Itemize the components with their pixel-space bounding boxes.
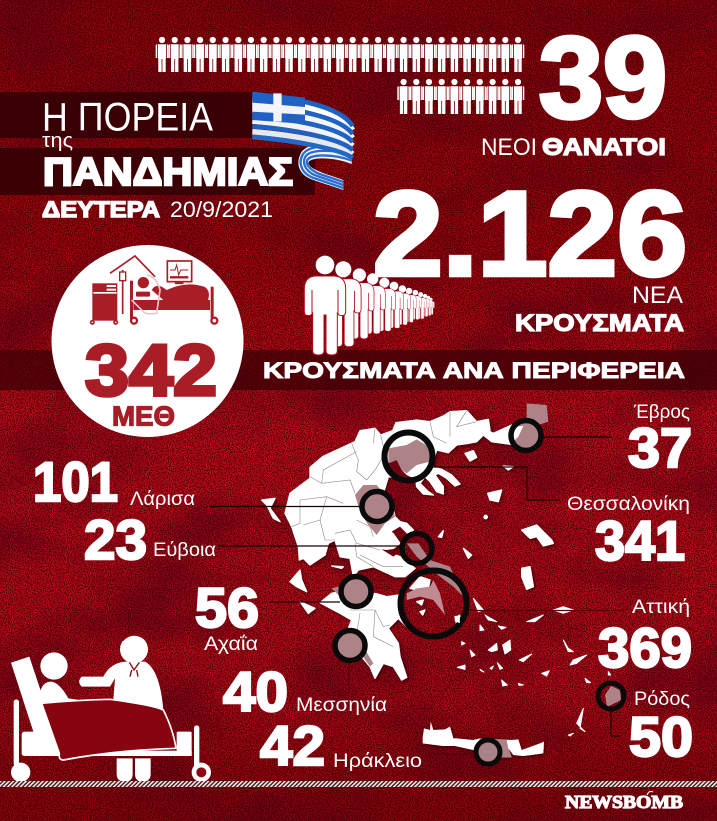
- icon: nurse and patient in bed: [11, 635, 209, 782]
- title panel: ΠΑΝΔΗΜΙΑΣ: [43, 151, 293, 194]
- label: Messinia 40: [223, 660, 387, 723]
- stat: 2.126 new cases: ΚΡΟΥΣΜΑΤΑ: [515, 310, 684, 337]
- map of Greece: [210, 403, 625, 764]
- label: Rhodes 50: 50: [629, 705, 693, 768]
- title panel: Η ΠΟΡΕΙΑ: [42, 96, 213, 140]
- label: Larissa 101: [33, 450, 195, 513]
- islands of the Aegean: [455, 598, 611, 736]
- Rhodes: [605, 686, 621, 707]
- panel: ICU patients circle: ΜΕΘ: [112, 400, 175, 432]
- label: Heraklion 42: Ηράκλειο: [333, 751, 422, 772]
- label: Evia 23: 23: [84, 508, 147, 571]
- label: Heraklion 42: 42: [260, 714, 325, 777]
- heading: cases by region: ΚΡΟΥΣΜΑΤΑ ΑΝΑ ΠΕΡΙΦΕΡΕΙΑ: [263, 358, 685, 383]
- label: Achaia 56: 56: [195, 576, 259, 639]
- stat: 2.126 new cases: 2.126: [373, 167, 687, 301]
- mainland and islands: [262, 411, 553, 680]
- label: Achaia 56: Αχαΐα: [204, 634, 258, 655]
- stat: 39 new deaths: 39: [539, 14, 667, 142]
- logo: Newsbomb: NEWSBOMB: [565, 792, 683, 812]
- Crete: [423, 722, 544, 764]
- label: Attica 369: 369: [598, 616, 692, 679]
- stat: 39 new deaths: ΘΑΝΑΤΟΙ: [542, 134, 666, 161]
- hatched footer stripe: [0, 781, 717, 787]
- label: Thessaloniki 341: [567, 494, 690, 572]
- label: Larissa 101: Λάρισα: [130, 489, 195, 510]
- label: Messinia 40: Μεσσηνία: [296, 695, 387, 716]
- icon: Greek flag ribbon: [252, 92, 353, 190]
- label: Evros 37: Έβρος: [633, 402, 690, 423]
- stat: 2.126 new cases: ΝΕΑ: [632, 282, 683, 309]
- affected regions shaded: [332, 403, 548, 667]
- icon: receding queue of people: [304, 256, 435, 355]
- panel: ICU patients circle: 342: [85, 331, 217, 411]
- title panel: ΔΕΥΤΕΡΑ: [42, 197, 160, 222]
- stat: 39 new deaths: [481, 14, 667, 161]
- title panel: 20/9/2021: [170, 197, 273, 222]
- label: Evia 23: [84, 508, 216, 571]
- leader lines: [210, 437, 625, 754]
- title panel: της: [42, 130, 73, 152]
- highlight rings on regions: [335, 420, 541, 660]
- label: Evia 23: Εύβοια: [153, 540, 216, 561]
- label: Messinia 40: 40: [223, 660, 288, 723]
- dark band behind regional heading: [0, 350, 717, 390]
- icon: ICU bed and equipment: [91, 256, 217, 324]
- label: Rhodes 50: Ρόδος: [634, 689, 690, 710]
- label: Thessaloniki 341: Θεσσαλονίκη: [567, 494, 690, 515]
- title panel: [0, 92, 315, 222]
- label: Evros 37: 37: [628, 416, 692, 479]
- stat: 39 new deaths: ΝΕΟΙ: [481, 134, 537, 161]
- label: Heraklion 42: [260, 714, 422, 777]
- label: Attica 369: Αττική: [632, 597, 690, 618]
- label: Thessaloniki 341: 341: [595, 509, 685, 572]
- panel: ICU patients circle: [52, 245, 244, 437]
- label: Larissa 101: 101: [33, 450, 118, 513]
- deaths pictogram: 39 people: [156, 37, 524, 114]
- region borders: [292, 411, 477, 647]
